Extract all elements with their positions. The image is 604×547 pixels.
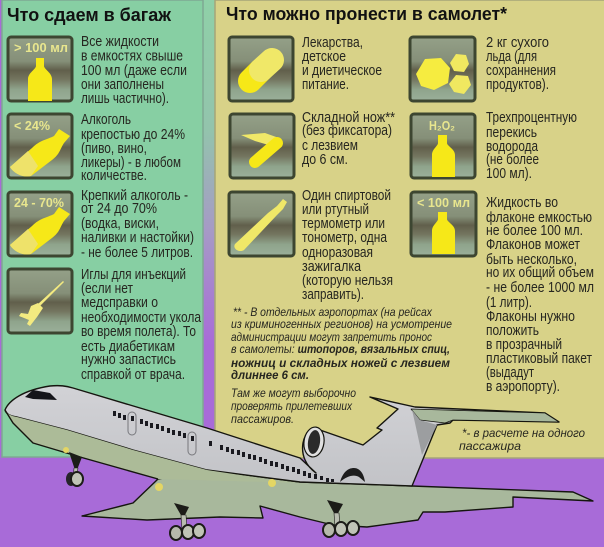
heading: checked baggage: Что сдаем в багаж bbox=[7, 5, 171, 25]
text: hydrogen peroxide bbox=[486, 110, 577, 182]
text: alcohol up to 24 percent: ликеры) - в любом bbox=[81, 155, 181, 171]
icon: bottle 24 to 70 percent bbox=[8, 192, 72, 256]
icon: hydrogen peroxide: H₂O₂ bbox=[429, 118, 455, 133]
text: injection needles: справкой от врача. bbox=[81, 367, 185, 383]
text: dry ice: сохраннения bbox=[486, 63, 556, 79]
note: airport restrictions: из криминогенных регионов) на усмотрение bbox=[231, 317, 452, 331]
wing bbox=[82, 470, 593, 527]
panel: allowed on board bbox=[215, 0, 604, 458]
text: folding knife bbox=[302, 110, 395, 168]
text: hydrogen peroxide: (не более bbox=[486, 152, 539, 168]
text: medicine bbox=[302, 35, 382, 93]
icon: bottle under 24 percent: < 24% bbox=[14, 118, 50, 133]
text: strong alcohol: - не более 5 литров. bbox=[81, 245, 193, 261]
note: airport restrictions: в самолеты: штопоров, вязальных спиц, bbox=[231, 342, 450, 356]
text: liquid in bottles: Флаконы нужно bbox=[486, 309, 575, 325]
icon: bottle under 24 percent bbox=[8, 114, 72, 178]
fin shade bbox=[412, 410, 437, 455]
text: thermometer: или ртутный bbox=[302, 202, 369, 218]
icon: thermometer bbox=[229, 192, 294, 256]
icon: bottle under 100 ml bbox=[411, 192, 476, 256]
note: airport restrictions: ** - В отдельных аэропортах (на рейсах bbox=[233, 305, 433, 319]
door windows bbox=[131, 416, 194, 441]
text: hydrogen peroxide: водорода bbox=[486, 139, 539, 155]
lower fuselage bbox=[5, 410, 300, 483]
text: thermometer: тонометр, одна bbox=[302, 230, 388, 246]
text: thermometer bbox=[302, 188, 393, 303]
gutter between panels bbox=[203, 0, 216, 460]
text: hydrogen peroxide: перекись bbox=[486, 125, 537, 141]
icon: folding knife bbox=[230, 114, 294, 178]
note: arriving passengers check bbox=[231, 386, 356, 426]
note: airport restrictions: администрации могут запретить пронос bbox=[231, 330, 432, 344]
text: thermometer: одноразовая bbox=[302, 245, 373, 261]
note: arriving passengers check: пассажиров. bbox=[231, 412, 294, 426]
text: liquid in bottles: положить bbox=[486, 323, 539, 339]
heading: allowed on board: Что можно пронести в самолет* bbox=[226, 4, 507, 24]
icon: bottle under 100 ml: < 100 мл bbox=[417, 195, 470, 210]
text: folding knife: (без фиксатора) bbox=[302, 123, 392, 139]
text: all liquids: Все жидкости bbox=[81, 34, 159, 50]
text: all liquids: 100 мл (даже если bbox=[81, 63, 187, 79]
text: medicine: детское bbox=[302, 49, 346, 65]
icon: capsule bbox=[229, 37, 293, 101]
text: dry ice: льда (для bbox=[486, 49, 537, 65]
text: injection needles: есть диабетикам bbox=[81, 339, 175, 355]
text: liquid in bottles: не более 100 мл. bbox=[486, 223, 583, 239]
text: thermometer: Один спиртовой bbox=[302, 188, 391, 204]
text: dry ice: продуктов). bbox=[486, 77, 549, 93]
note: per passenger: *- в расчете на одного bbox=[462, 426, 585, 440]
text: medicine: питание. bbox=[302, 77, 349, 93]
icon: syringe needle bbox=[8, 269, 72, 333]
icon: bottle over 100 ml bbox=[8, 37, 72, 101]
text: all liquids bbox=[81, 34, 187, 107]
text: folding knife: Складной нож** bbox=[302, 110, 395, 126]
icon: hydrogen peroxide bbox=[411, 114, 475, 178]
text: alcohol up to 24 percent: (пиво, вино, bbox=[81, 141, 147, 157]
text: injection needles bbox=[81, 267, 202, 383]
text: dry ice: 2 кг сухого bbox=[486, 35, 549, 51]
text: injection needles: нужно запастись bbox=[81, 352, 176, 368]
text: liquid in bottles: (1 литр). bbox=[486, 295, 532, 311]
note: airport restrictions: длиннее 6 см. bbox=[231, 368, 309, 382]
text: alcohol up to 24 percent: крепостью до 24% bbox=[81, 127, 185, 143]
text: alcohol up to 24 percent: количестве. bbox=[81, 168, 147, 184]
text: injection needles: необходимости укола bbox=[81, 310, 202, 326]
text: liquid in bottles: Флаконов может bbox=[486, 237, 580, 253]
text: strong alcohol: (водка, виски, bbox=[81, 216, 159, 232]
text: liquid in bottles: Жидкость во bbox=[486, 195, 558, 211]
text: injection needles: (если нет bbox=[81, 281, 133, 297]
text: liquid in bottles bbox=[486, 195, 594, 395]
icon: dry ice bbox=[410, 37, 475, 101]
text: alcohol up to 24 percent bbox=[81, 112, 185, 184]
text: thermometer: заправить). bbox=[302, 287, 364, 303]
main landing gear left bbox=[170, 503, 205, 540]
icon: bottle 24 to 70 percent: 24 - 70% bbox=[14, 195, 64, 210]
fuselage engine intake bbox=[340, 468, 365, 482]
text: liquid in bottles: в аэропорту). bbox=[486, 379, 560, 395]
text: injection needles: Иглы для инъекций bbox=[81, 267, 186, 283]
text: all liquids: в емкостях свыше bbox=[81, 48, 183, 64]
text: folding knife: с лезвием bbox=[302, 138, 358, 154]
cockpit bbox=[25, 390, 57, 400]
text: liquid in bottles: быть несколько, bbox=[486, 252, 577, 268]
note: airport restrictions: ножниц и складных ножей с лезвием bbox=[231, 356, 450, 370]
text: all liquids: лишь частично). bbox=[81, 91, 169, 107]
tailplane bbox=[411, 409, 559, 423]
text: dry ice bbox=[486, 35, 556, 93]
text: thermometer: (которую нельзя bbox=[302, 273, 393, 289]
text: folding knife: до 6 см. bbox=[302, 152, 348, 168]
text: liquid in bottles: (выдадут bbox=[486, 365, 534, 381]
panel: checked baggage bbox=[2, 0, 203, 457]
cabin windows bbox=[113, 411, 334, 482]
text: injection needles: во время полета). То bbox=[81, 324, 196, 340]
airplane bbox=[5, 386, 593, 540]
note: arriving passengers check: проверять прилетевших bbox=[231, 399, 353, 413]
text: medicine: Лекарства, bbox=[302, 35, 363, 51]
text: thermometer: зажигалка bbox=[302, 259, 362, 275]
text: strong alcohol: от 24 до 70% bbox=[81, 201, 157, 217]
text: all liquids: они заполнены bbox=[81, 77, 164, 93]
text: strong alcohol: Крепкий алкоголь - bbox=[81, 188, 188, 204]
note: airport restrictions bbox=[231, 305, 452, 382]
main landing gear right bbox=[323, 500, 359, 537]
text: strong alcohol: наливки и настойки) bbox=[81, 230, 194, 246]
text: alcohol up to 24 percent: Алкоголь bbox=[81, 112, 131, 128]
icon: bottle over 100 ml: > 100 мл bbox=[14, 40, 68, 55]
text: thermometer: термометр или bbox=[302, 216, 385, 232]
text: strong alcohol bbox=[81, 188, 194, 261]
landing lights bbox=[63, 447, 276, 491]
cabin doors bbox=[128, 412, 196, 455]
note: per passenger bbox=[459, 426, 585, 453]
text: hydrogen peroxide: Трехпроцентную bbox=[486, 110, 577, 126]
note: per passenger: пассажира bbox=[459, 439, 521, 453]
text: injection needles: медсправки о bbox=[81, 295, 158, 311]
fuselage and tail bbox=[5, 386, 559, 486]
engine intake bbox=[302, 426, 326, 458]
text: medicine: и диетическое bbox=[302, 63, 382, 79]
text: liquid in bottles: в прозрачный bbox=[486, 337, 562, 353]
text: hydrogen peroxide: 100 мл). bbox=[486, 166, 532, 182]
note: arriving passengers check: Там же могут выборочно bbox=[231, 386, 356, 400]
nose landing gear bbox=[66, 452, 83, 486]
